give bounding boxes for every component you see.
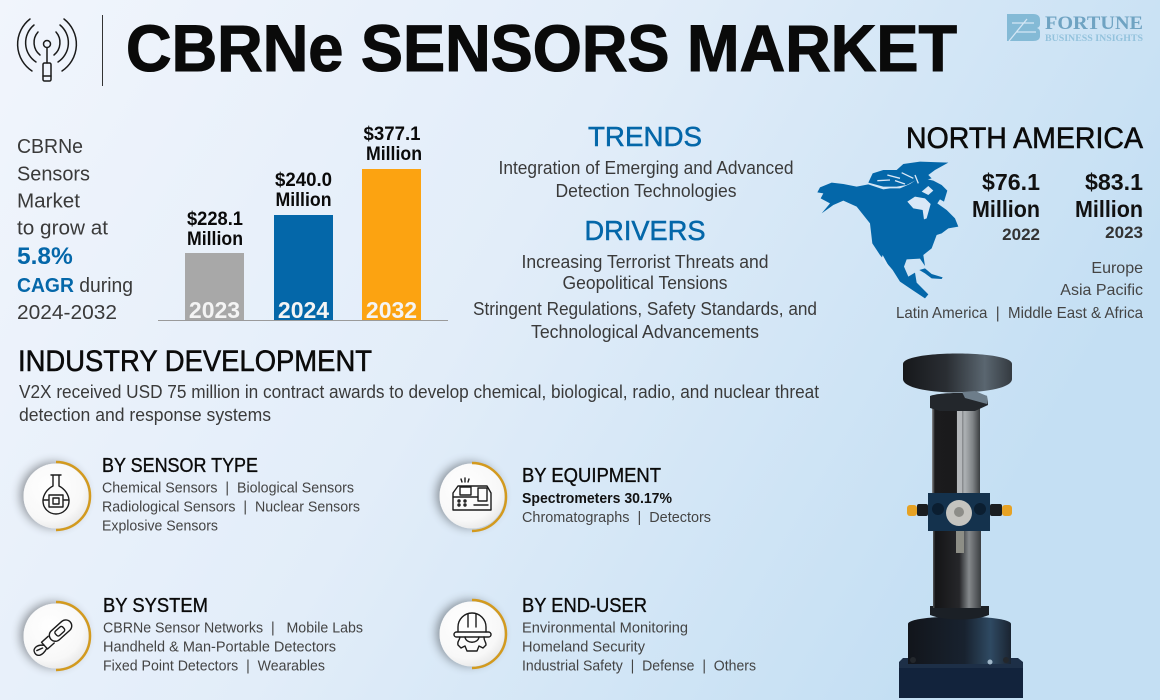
bar: 2023: 2023: [189, 297, 240, 323]
panel: by end-user: Environmental Monitoring: [522, 620, 688, 636]
value: 2022: 2022: [1002, 225, 1040, 244]
panel: by end-user: [440, 595, 756, 674]
growth text block: CAGR during: [17, 275, 133, 297]
panel: drivers: Stringent Regulations, Safety Standards, and: [473, 299, 817, 319]
growth text block: Sensors: [17, 164, 90, 186]
icon: handheld detector: [24, 602, 90, 670]
growth text block: to grow at: [17, 218, 108, 240]
panel: by sensor type: Radiological Sensors | Nuclear Sensors: [102, 498, 360, 516]
panel: by system: Fixed Point Detectors | Wearables: [103, 658, 325, 674]
panel: industry development: V2X received USD 75 million in contract awards to develop chemical, biological, radio, and nuclear threat: [19, 382, 819, 402]
panel: drivers: [473, 215, 817, 342]
bar: 2032: 2032: [366, 297, 417, 323]
value: 2023: [1075, 169, 1143, 242]
bar: 2023: [185, 209, 244, 323]
divider: [102, 15, 103, 86]
bar: 2024: [274, 170, 333, 323]
bar: 2024: 2024: [278, 297, 329, 323]
panel: by equipment: BY EQUIPMENT: [522, 465, 661, 487]
growth text block: 5.8%: [17, 243, 73, 270]
panel: trends: [498, 121, 794, 201]
panel: by system: Handheld & Man-Portable Detectors: [103, 638, 336, 656]
growth text block: [17, 136, 133, 324]
value: 2023: Million: [1075, 196, 1143, 222]
panel: drivers: Increasing Terrorist Threats and: [522, 252, 768, 272]
value: 2023: $83.1: [1085, 169, 1143, 195]
bar: 2023: $228.1: [187, 209, 243, 230]
panel: by end-user: Homeland Security: [522, 638, 645, 656]
panel: by system: CBRNe Sensor Networks | Mobile Labs: [103, 620, 363, 636]
logo: Fortune Business Insights: FORTUNE: [1045, 13, 1143, 34]
panel: drivers: Technological Advancements: [531, 322, 759, 342]
icon: hard hat and gear: [440, 600, 506, 668]
panel: by equipment: Chromatographs | Detectors: [522, 509, 711, 526]
logo: Fortune Business Insights: BUSINESS INSIGHTS: [1045, 34, 1143, 44]
panel: industry development: [18, 345, 819, 425]
map: north america: [817, 162, 958, 298]
bar: 2024: $240.0: [275, 170, 332, 191]
panel: by equipment: [440, 463, 711, 531]
panel: by system: BY SYSTEM: [103, 595, 208, 617]
other regions: Europe: [1091, 260, 1143, 277]
bar chart: [158, 124, 448, 323]
bar: 2032: [362, 124, 422, 323]
other regions: [896, 260, 1143, 322]
value: 2022: Million: [972, 196, 1040, 222]
bar: 2024: Million: [276, 190, 332, 211]
panel: trends: Detection Technologies: [556, 181, 736, 201]
bar: 2032: $377.1: [364, 124, 421, 145]
growth text block: 2024-2032: [17, 302, 117, 324]
panel: industry development: INDUSTRY DEVELOPMENT: [18, 345, 372, 378]
icon: flask with chip: [24, 462, 90, 530]
bar: 2023: Million: [187, 229, 243, 250]
value: 2022: [972, 169, 1040, 244]
panel: by sensor type: Chemical Sensors | Biological Sensors: [102, 480, 354, 496]
other regions: Asia Pacific: [1060, 282, 1143, 299]
panel: north america: [817, 122, 1143, 322]
panel: by end-user: Industrial Safety | Defense | Others: [522, 658, 756, 674]
heading: BY SENSOR TYPE: [102, 455, 258, 477]
panel: drivers: Geopolitical Tensions: [562, 273, 728, 293]
panel: by sensor type: Explosive Sensors: [102, 518, 218, 534]
value: 2022: $76.1: [982, 169, 1040, 195]
panel: by equipment: Spectrometers 30.17%: [522, 491, 672, 507]
panel: drivers: DRIVERS: [584, 215, 706, 246]
panel: by end-user: BY END-USER: [522, 595, 647, 617]
logo: Fortune Business Insights: [1007, 13, 1143, 44]
growth text block: CBRNe: [17, 136, 83, 158]
panel: industry development: detection and response systems: [19, 405, 271, 425]
icon: spectrometer: [440, 463, 506, 531]
heading: NORTH AMERICA: [906, 122, 1143, 155]
value: 2023: 2023: [1105, 223, 1143, 242]
illustration: CBRNe sensor device: [899, 354, 1023, 698]
panel: by sensor type: [24, 455, 360, 534]
growth text block: Market: [17, 190, 80, 212]
panel: by system: [24, 595, 363, 674]
bar: 2032: Million: [366, 144, 422, 165]
title: CBRNe SENSORS MARKET: [126, 11, 957, 85]
icon: radio antenna: [18, 19, 76, 81]
panel: trends: Integration of Emerging and Advanced: [498, 158, 794, 178]
other regions: Latin America | Middle East & Africa: [896, 305, 1143, 322]
panel: trends: TRENDS: [588, 121, 702, 152]
